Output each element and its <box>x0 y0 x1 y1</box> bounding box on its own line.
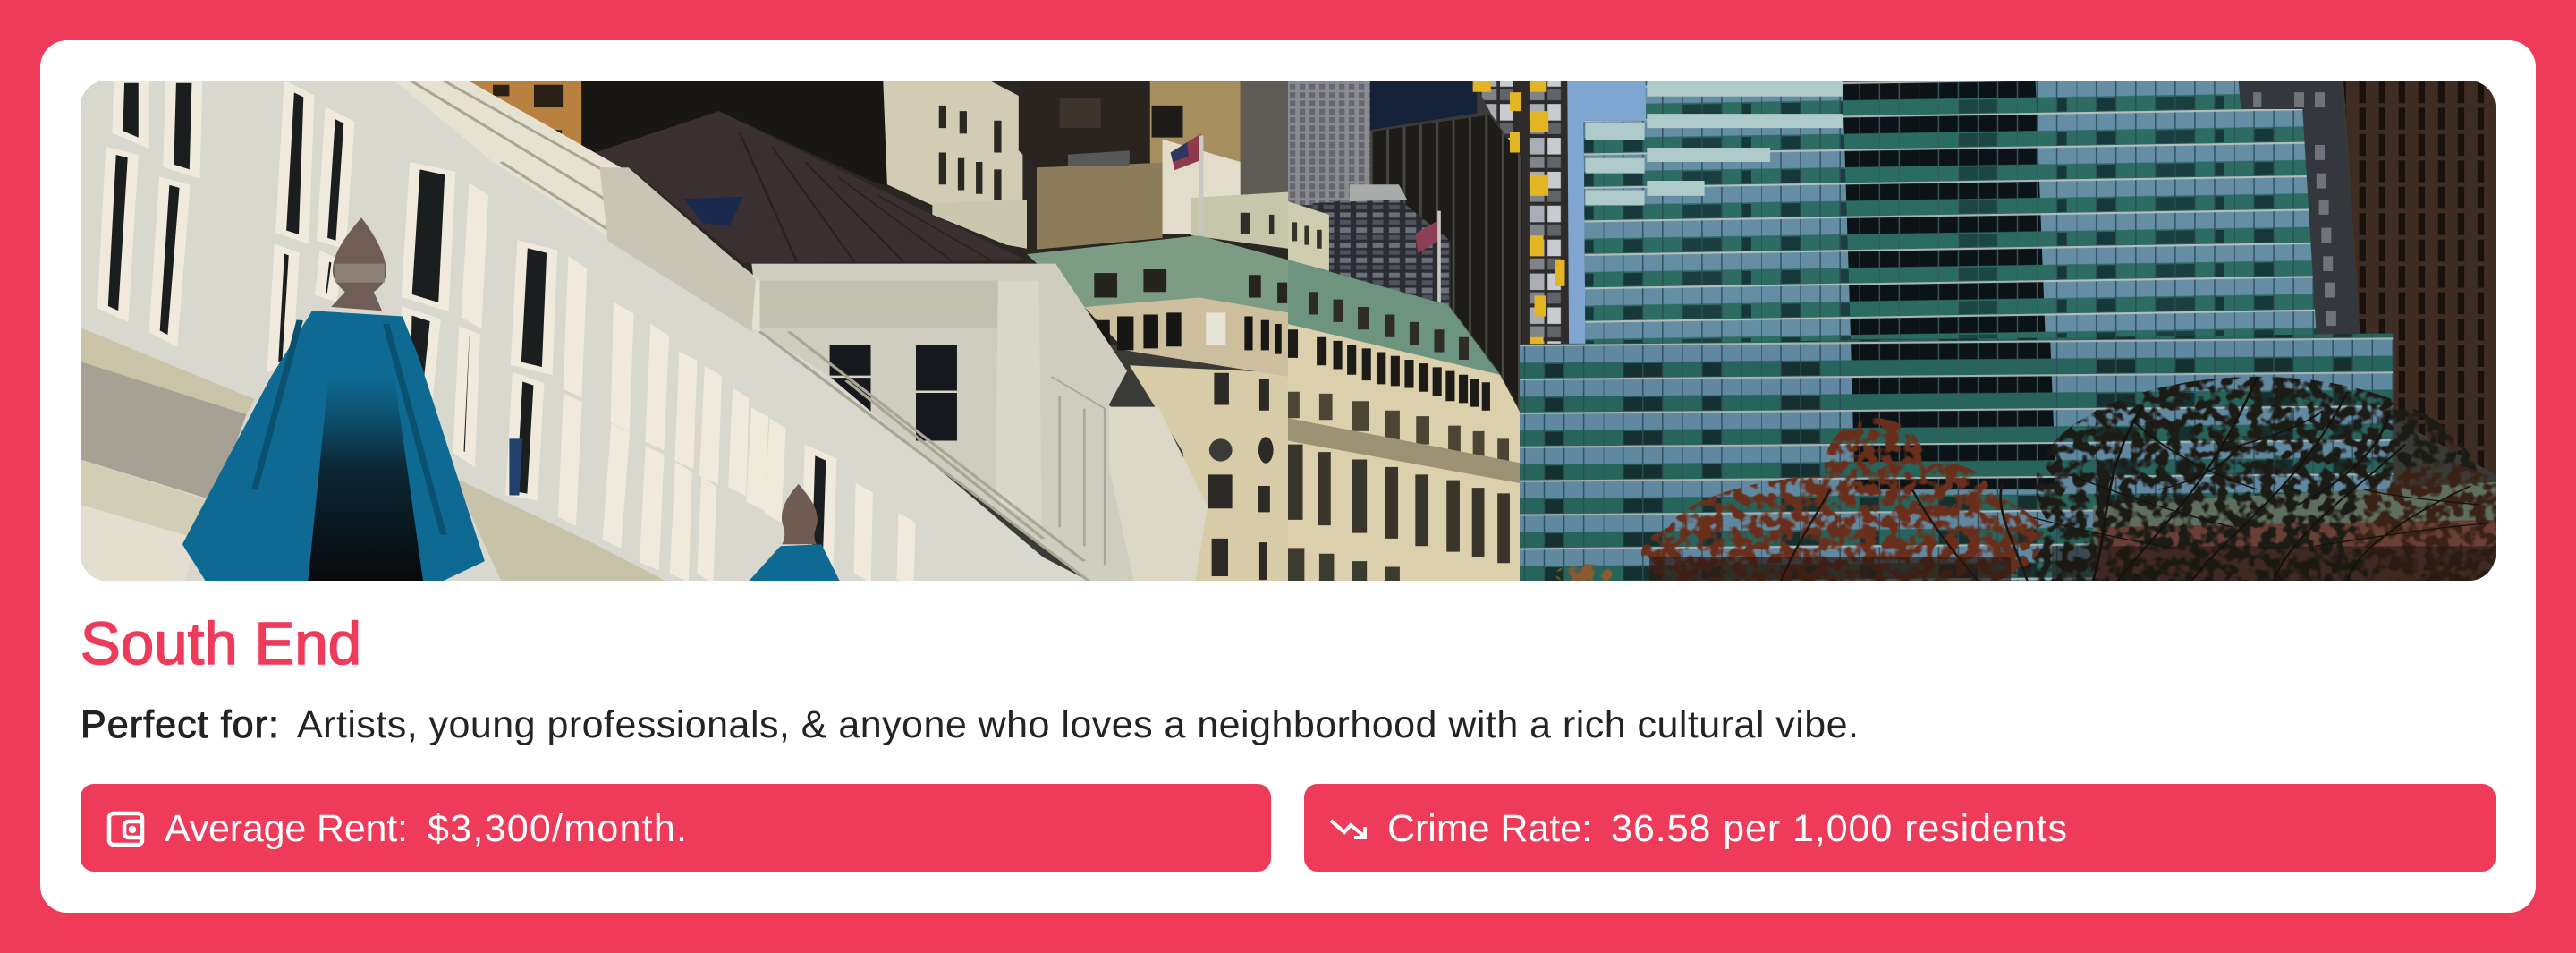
photo: low building behind trees <box>2093 482 2496 581</box>
photo: small dark office tower with flag <box>1313 184 1451 307</box>
text: perfect for description: Perfect for: <box>80 703 279 746</box>
photo: brown and dark background towers <box>2237 81 2496 474</box>
text: crime rate value <box>1387 807 2067 850</box>
photo left half: white facade, roof and ornate buildings <box>80 81 1290 581</box>
icon: trending down arrow <box>1331 821 1365 838</box>
photo: dark metal roof <box>567 111 1027 263</box>
text: crime rate value: Crime Rate: <box>1387 807 1592 850</box>
text: average rent value <box>165 807 687 850</box>
stat pill: average rent <box>80 784 1271 872</box>
photo: green mansard building <box>1027 235 1288 581</box>
text: perfect for description: Artists, young professionals, & anyone who loves a neighborhood with a rich cultural vibe. <box>297 703 1859 746</box>
photo: main white facade <box>80 81 1089 581</box>
photo right half: towers, teal office block and trees <box>1288 81 2521 602</box>
icon: wallet <box>109 813 142 845</box>
photo: bare dark tree <box>1996 376 2496 581</box>
photo: American flag <box>1171 133 1201 170</box>
photo: small teal umbrella <box>750 484 840 581</box>
photo: teal glass office block <box>1520 81 2496 581</box>
text: crime rate value: 36.58 per 1,000 residents <box>1611 807 2067 850</box>
photo: large teal umbrella <box>182 217 485 581</box>
text: average rent value: Average Rent: <box>165 807 408 850</box>
photo: red autumn tree <box>1555 418 2044 581</box>
heading: South End: South End <box>80 610 361 677</box>
photo: ornate beige building <box>1288 260 1535 581</box>
photo: rear grey wing <box>751 264 1208 581</box>
photo: South End buildings <box>80 81 2521 602</box>
text: average rent value: $3,300/month. <box>428 807 687 850</box>
stat pill: crime rate <box>1304 784 2496 872</box>
